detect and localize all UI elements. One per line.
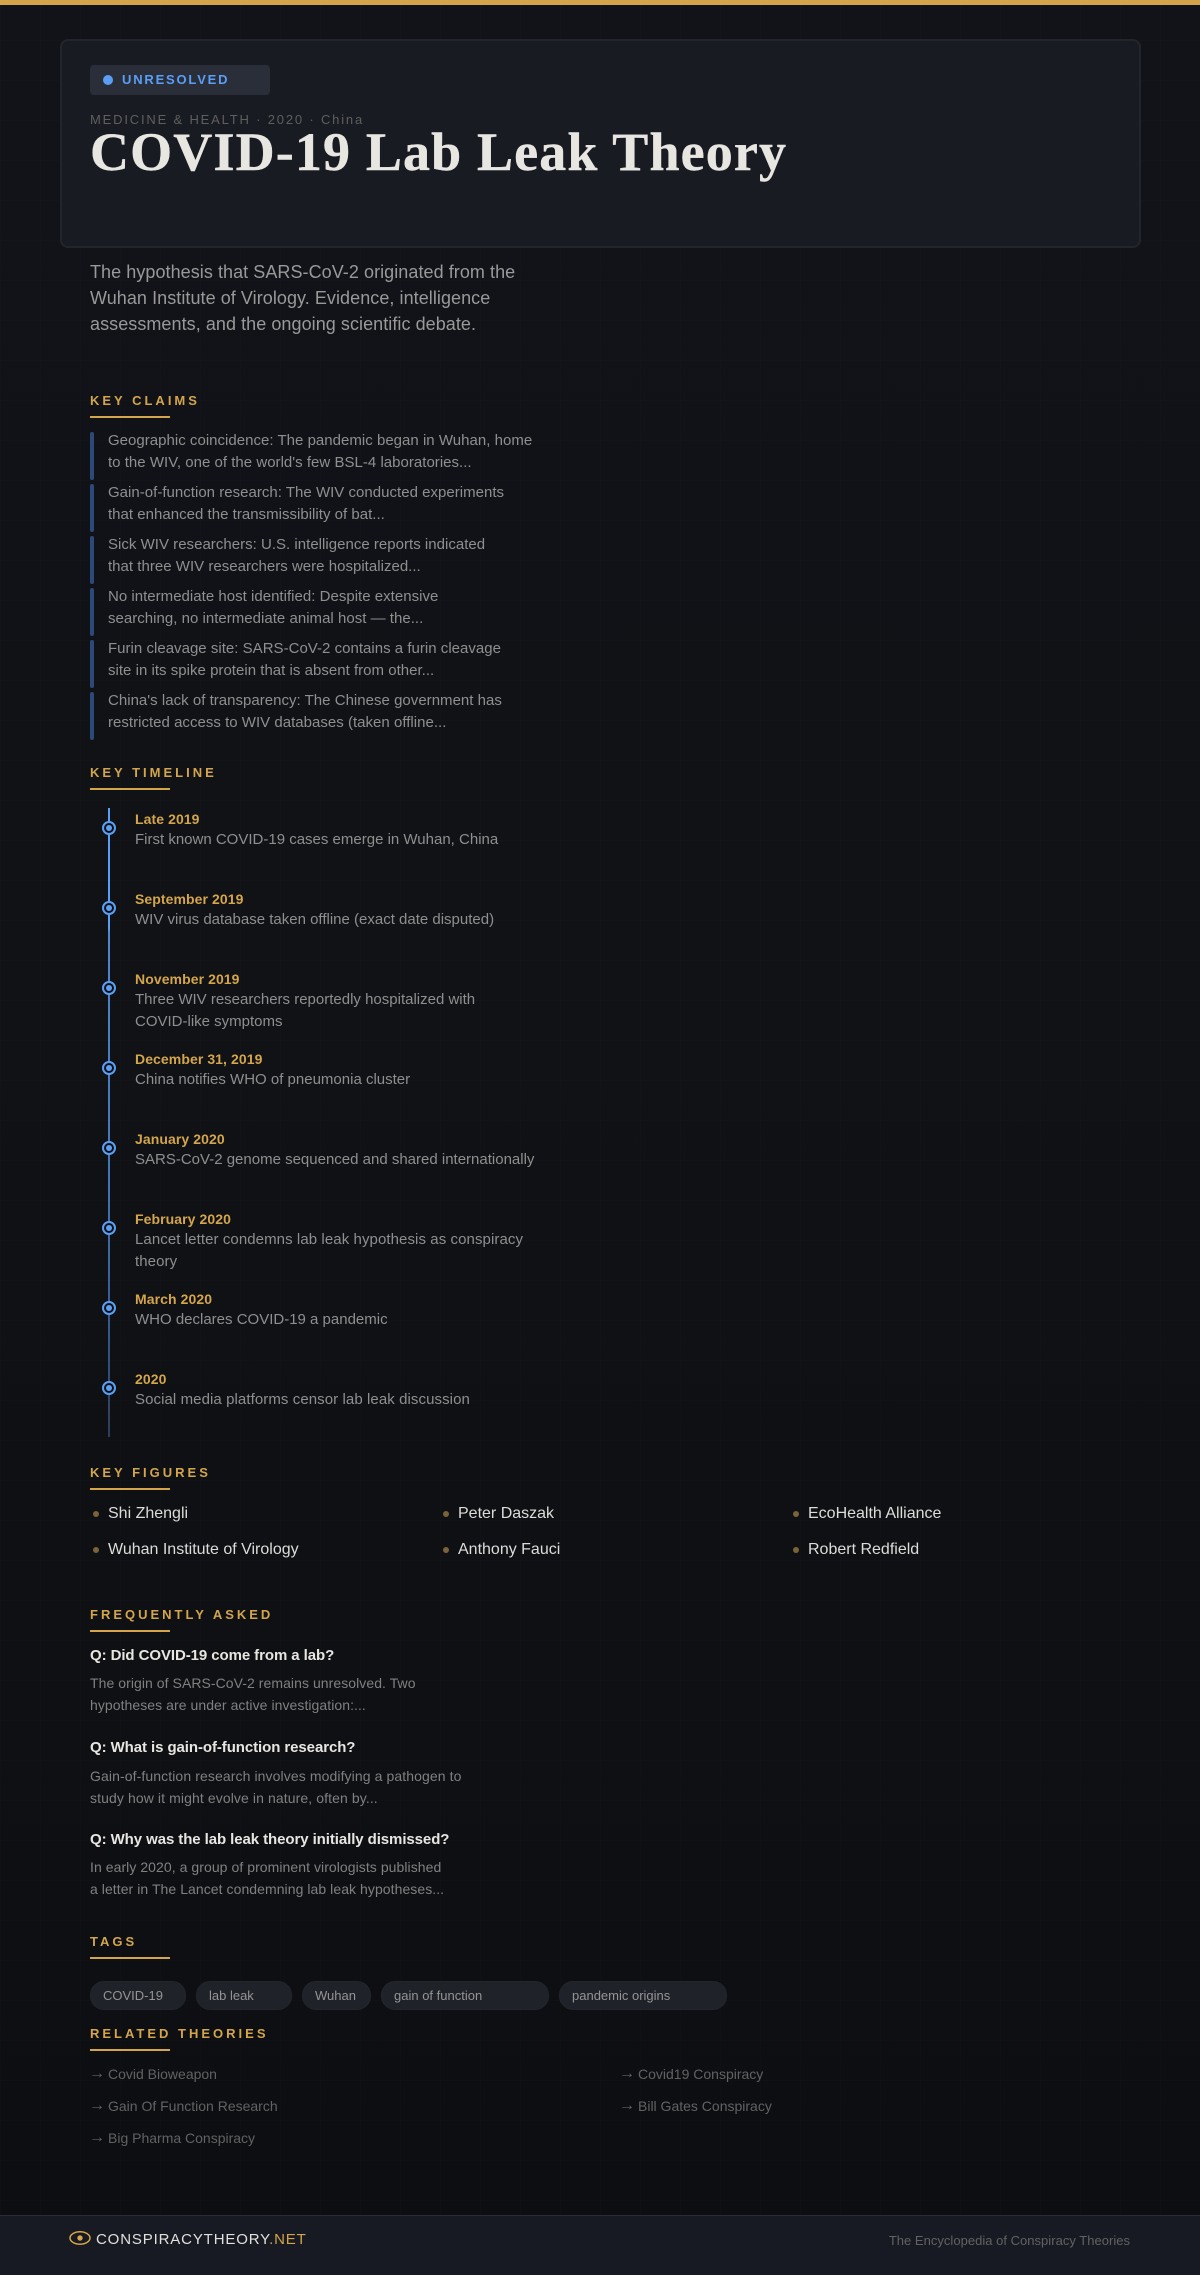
event: September 2019: WIV virus database taken offline (exact date disputed) [135, 911, 494, 928]
event: February 2020: Lancet letter condemns lab leak hypothesis as conspiracy [135, 1231, 523, 1248]
title: COVID-19 Lab Leak Theory [90, 122, 787, 182]
link: Gain Of Function Research: → [89, 2097, 105, 2114]
event: Late 2019 [102, 811, 498, 848]
badge label: UNRESOLVED [122, 72, 229, 87]
faq 3 [90, 1831, 449, 1897]
event: November 2019: Three WIV researchers reportedly hospitalized with [135, 991, 475, 1008]
event: February 2020 [102, 1211, 523, 1270]
claim 1: Geographic coincidence: The pandemic began in Wuhan, home [108, 432, 532, 449]
panel: key claims [90, 393, 532, 740]
figure: Peter Daszak: Peter Daszak [458, 1505, 554, 1522]
faq 1: hypotheses are under active investigation:... [90, 1697, 366, 1713]
faq 3: In early 2020, a group of prominent virologists published [90, 1859, 441, 1875]
event: November 2019: COVID-like symptoms [135, 1013, 283, 1030]
claim 6: China's lack of transparency: The Chinese government has [108, 692, 502, 709]
header panel [60, 39, 1141, 248]
link: Covid19 Conspiracy: Covid19 Conspiracy [638, 2066, 763, 2082]
icon: status dot [103, 75, 113, 85]
event: January 2020: SARS-CoV-2 genome sequenced and shared internationally [135, 1151, 534, 1168]
logo text: CONSPIRACYTHEORY.NET [96, 2231, 307, 2248]
claim 3: Sick WIV researchers: U.S. intelligence reports indicated [108, 536, 485, 553]
tag: pandemic origins [559, 1981, 727, 2010]
claim 2 [90, 484, 504, 532]
event: Late 2019: Late 2019 [135, 811, 200, 827]
claim 4: searching, no intermediate animal host — the... [108, 610, 423, 627]
panel: tags [90, 1934, 727, 2010]
event: February 2020: theory [135, 1253, 177, 1270]
event: January 2020 [102, 1131, 534, 1168]
link: Covid Bioweapon: Covid Bioweapon [108, 2066, 217, 2082]
event: January 2020: January 2020 [135, 1131, 225, 1147]
faq 2 [90, 1739, 462, 1806]
faq 1 [90, 1647, 416, 1713]
event: 2020: Social media platforms censor lab leak discussion [135, 1391, 470, 1408]
event: 2020: 2020 [135, 1371, 166, 1387]
panel: related theories [89, 2026, 772, 2146]
figure: Shi Zhengli: Shi Zhengli [108, 1505, 188, 1522]
claim 5: Furin cleavage site: SARS-CoV-2 contains a furin cleavage [108, 640, 501, 657]
event: February 2020: February 2020 [135, 1211, 231, 1227]
faq 2: Gain-of-function research involves modifying a pathogen to [90, 1768, 462, 1784]
tag: gain of function [381, 1981, 549, 2010]
faq 3: Q: Why was the lab leak theory initially dismissed? [90, 1831, 449, 1848]
faq 3: a letter in The Lancet condemning lab leak hypotheses... [90, 1881, 444, 1897]
description [90, 262, 515, 334]
claim 4: No intermediate host identified: Despite extensive [108, 588, 438, 605]
event: March 2020: March 2020 [135, 1291, 212, 1307]
tag: lab leak: lab leak [209, 1988, 254, 2003]
event: 2020 [102, 1371, 470, 1408]
event: March 2020 [102, 1291, 388, 1328]
faq 2: Q: What is gain-of-function research? [90, 1739, 355, 1756]
heading: frequently asked: FREQUENTLY ASKED [90, 1607, 273, 1622]
faq 1: The origin of SARS-CoV-2 remains unresolved. Two [90, 1675, 416, 1691]
faq 1: Q: Did COVID-19 come from a lab? [90, 1647, 334, 1664]
description: Wuhan Institute of Virology. Evidence, intelligence [90, 288, 490, 308]
link: Gain Of Function Research: Gain Of Function Research [108, 2098, 278, 2114]
event: November 2019: November 2019 [135, 971, 240, 987]
footer [0, 2215, 1200, 2275]
figure: Robert Redfield: Robert Redfield [808, 1541, 919, 1558]
claim 5 [90, 640, 501, 688]
tag: Wuhan [302, 1981, 371, 2010]
icon: eye logo [69, 2231, 91, 2245]
status badge: unresolved [90, 65, 270, 95]
claim 2: Gain-of-function research: The WIV conducted experiments [108, 484, 504, 501]
link: Big Pharma Conspiracy: Big Pharma Conspiracy [108, 2130, 255, 2146]
tag: lab leak [196, 1981, 292, 2010]
heading: related theories: RELATED THEORIES [90, 2026, 268, 2041]
claim 1 [90, 432, 532, 480]
event: December 31, 2019: China notifies WHO of pneumonia cluster [135, 1071, 410, 1088]
claim 1: to the WIV, one of the world's few BSL-4 laboratories... [108, 454, 472, 471]
tag: Wuhan: Wuhan [315, 1988, 356, 2003]
timeline axis line [108, 808, 110, 1437]
description: The hypothesis that SARS-CoV-2 originated from the [90, 262, 515, 282]
figure: EcoHealth Alliance: EcoHealth Alliance [808, 1505, 941, 1522]
event: December 31, 2019: December 31, 2019 [135, 1051, 262, 1067]
heading: key timeline: KEY TIMELINE [90, 765, 217, 780]
event: November 2019 [102, 971, 475, 1030]
link: Covid Bioweapon: → [89, 2065, 105, 2082]
claim 3: that three WIV researchers were hospitalized... [108, 558, 421, 575]
event: September 2019: September 2019 [135, 891, 244, 907]
event: Late 2019: First known COVID-19 cases emerge in Wuhan, China [135, 831, 498, 848]
faq 2: study how it might evolve in nature, often by... [90, 1790, 378, 1806]
link: Covid19 Conspiracy: → [619, 2065, 635, 2082]
claim 2: that enhanced the transmissibility of bat... [108, 506, 385, 523]
link: Bill Gates Conspiracy: → [619, 2097, 635, 2114]
event: December 31, 2019 [102, 1051, 410, 1088]
heading: key figures: KEY FIGURES [90, 1465, 211, 1480]
tag: COVID-19: COVID-19 [103, 1988, 163, 2003]
tag: gain of function: gain of function [394, 1988, 482, 2003]
tagline: The Encyclopedia of Conspiracy Theories [889, 2233, 1130, 2248]
claim 3 [90, 536, 485, 584]
event: March 2020: WHO declares COVID-19 a pandemic [135, 1311, 388, 1328]
claim 4 [90, 588, 438, 636]
tag: pandemic origins: pandemic origins [572, 1988, 670, 2003]
description: assessments, and the ongoing scientific debate. [90, 314, 476, 334]
event: September 2019 [102, 891, 494, 928]
link: Bill Gates Conspiracy: Bill Gates Conspiracy [638, 2098, 772, 2114]
claim 6: restricted access to WIV databases (taken offline... [108, 714, 446, 731]
meta line: MEDICINE & HEALTH · 2020 · China [90, 112, 364, 127]
claim 6 [90, 692, 502, 740]
tag: COVID-19 [90, 1981, 186, 2010]
heading: tags: TAGS [90, 1934, 137, 1949]
figure: Anthony Fauci: Anthony Fauci [458, 1541, 560, 1558]
figure: Wuhan Institute of Virology: Wuhan Institute of Virology [108, 1541, 299, 1558]
claim 5: site in its spike protein that is absent from other... [108, 662, 434, 679]
top accent bar [0, 0, 1200, 5]
panel: key figures [90, 1465, 941, 1558]
heading: key claims: KEY CLAIMS [90, 393, 200, 408]
panel: frequently asked [90, 1607, 462, 1897]
chart: timeline [102, 808, 534, 1437]
link: Big Pharma Conspiracy: → [89, 2129, 105, 2146]
pill row [90, 1981, 727, 2010]
